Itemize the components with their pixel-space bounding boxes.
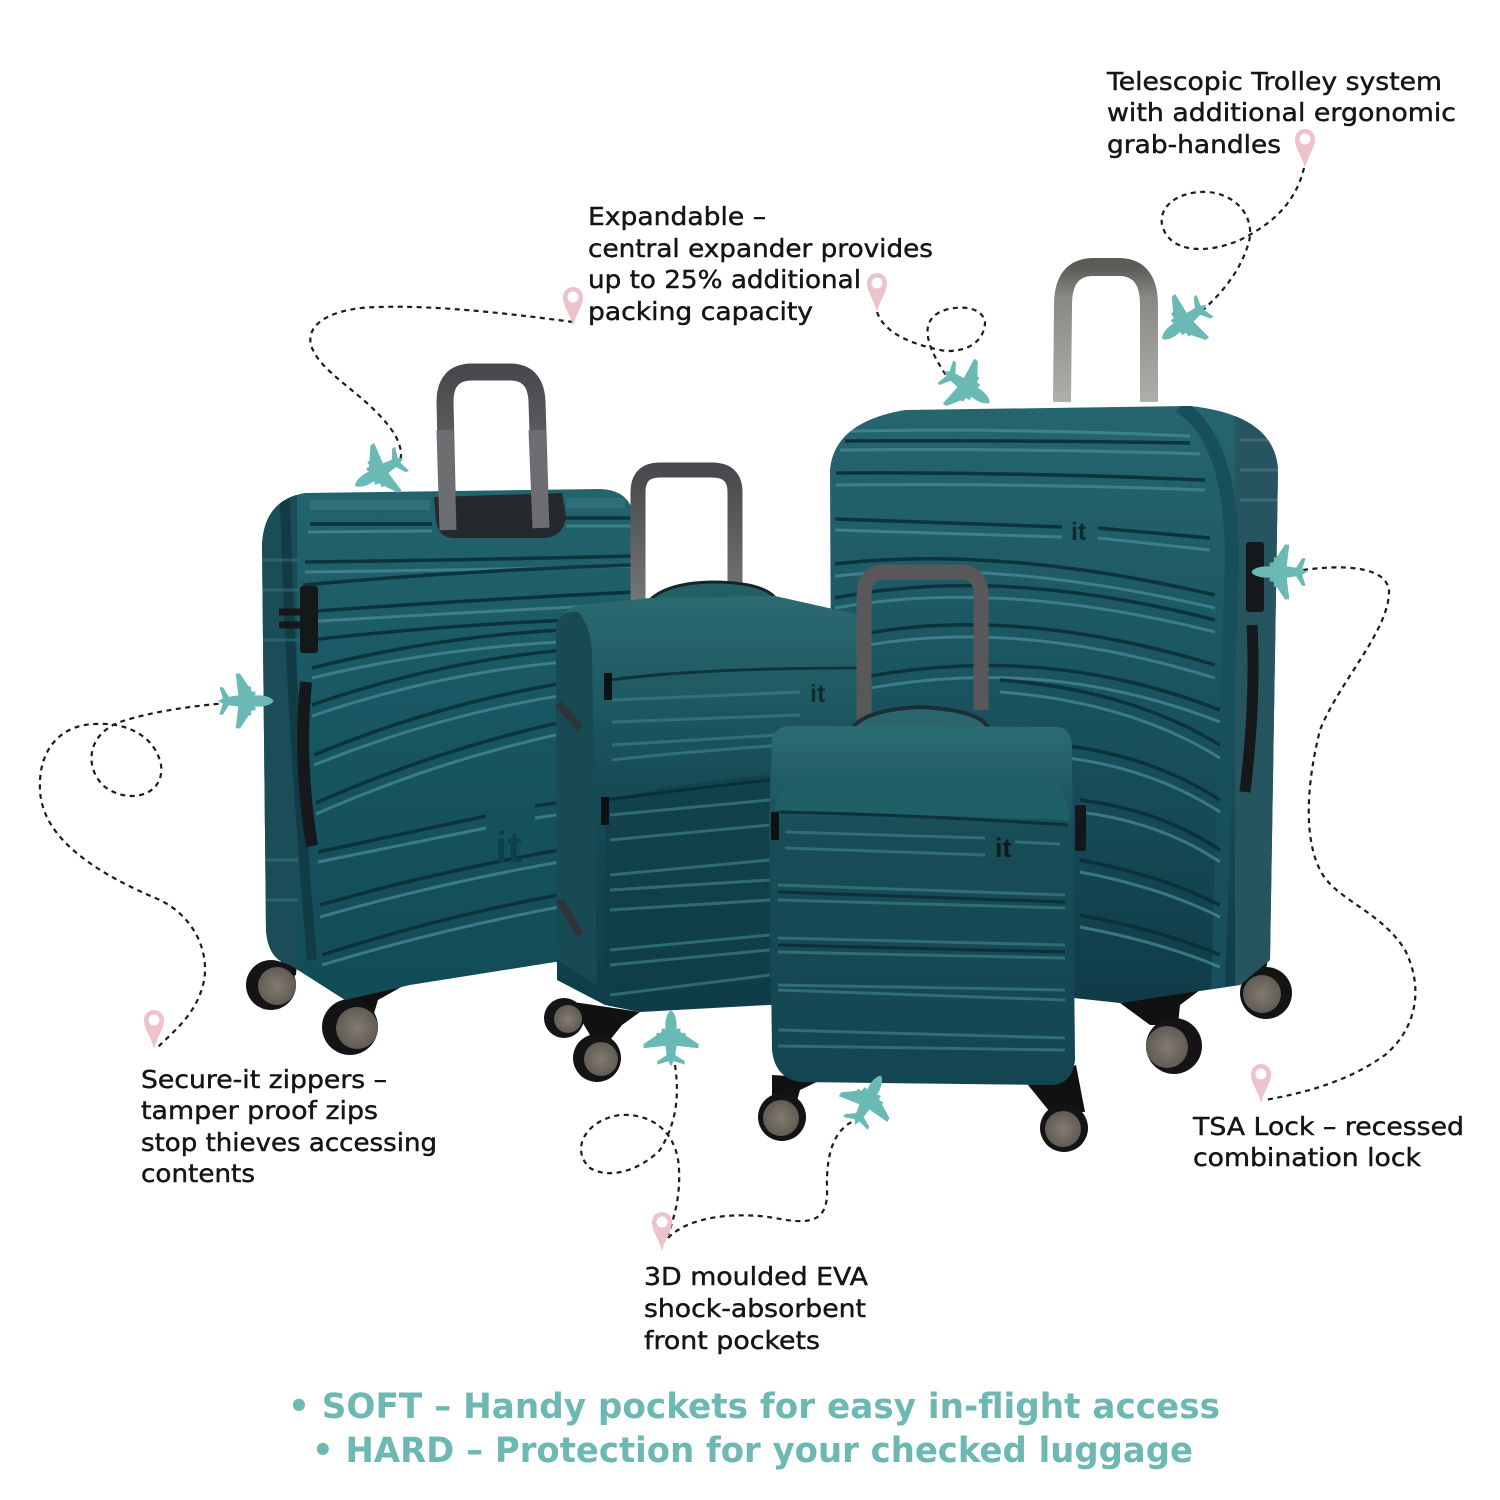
right suitcase handle: [1062, 267, 1149, 402]
medium suitcase handle: [638, 470, 735, 610]
text: telescopic trolley system: [1106, 67, 1456, 159]
small suitcase body: [769, 726, 1075, 1085]
right suitcase side grip: [1245, 625, 1253, 792]
right suitcase wheels: [1120, 960, 1292, 1074]
dashed route: expandable: [877, 308, 985, 378]
text: 3D moulded EVA: shock-absorbent: [644, 1294, 866, 1323]
text: secure-it zippers: [141, 1065, 437, 1188]
text: secure-it zippers: Secure-it zippers –: [141, 1065, 387, 1094]
icon: pin, EVA: [652, 1212, 672, 1251]
icon: pin, zippers: [144, 1010, 164, 1049]
dashed route: telescopic trolley: [1162, 168, 1304, 310]
medium suitcase body: [556, 596, 860, 1012]
text: telescopic trolley system: with additional ergonomic: [1107, 98, 1456, 127]
icon: pin, trolley: [1295, 129, 1315, 168]
medium suitcase wheels: [544, 998, 640, 1082]
text: secure-it zippers: contents: [141, 1159, 255, 1188]
heading: soft and hard summary: • SOFT – Handy pockets for easy in-flight access: [288, 1387, 1220, 1427]
small soft suitcase: [758, 572, 1088, 1152]
heading: soft and hard summary: [288, 1387, 1220, 1471]
left suitcase handle: [445, 372, 541, 530]
small suitcase wheels: [758, 1065, 1088, 1152]
medium suitcase pocket ribs: [605, 668, 860, 995]
icon: pin, expander: [867, 273, 887, 312]
left suitcase side grip: [303, 682, 312, 846]
left suitcase wheels: [246, 950, 410, 1055]
medium suitcase lower pocket: [605, 775, 770, 1012]
icon: plane, right side: [1252, 545, 1307, 599]
text: expandable: up to 25% additional: [588, 265, 861, 294]
text: expandable: packing capacity: [588, 297, 813, 326]
dashed route: EVA pockets, first plane: [581, 1065, 679, 1235]
medium suitcase logo: it: [810, 680, 826, 708]
icon: plane, left top: [342, 434, 417, 509]
text: TSA lock: [1192, 1112, 1464, 1172]
right suitcase TSA lock: [1246, 542, 1264, 612]
small suitcase upper pocket: [775, 772, 1070, 820]
text: expandable: central expander provides: [588, 234, 933, 263]
icon: plane, bottom centre: [644, 1011, 698, 1066]
small suitcase zip pull: [771, 812, 779, 840]
right suitcase shell: [825, 400, 1285, 1010]
medium soft suitcase: [544, 470, 860, 1082]
dashed route: EVA pockets, second plane: [668, 1118, 862, 1238]
text: expandable: [588, 202, 933, 326]
text: 3D moulded EVA: front pockets: [644, 1326, 820, 1355]
medium suitcase zip pulls: [605, 673, 608, 825]
left suitcase TSA lock: [300, 586, 318, 653]
medium suitcase top grab handle: [645, 582, 777, 606]
dashed route: top left pin: [310, 307, 573, 465]
dashed route: TSA lock: [1265, 567, 1415, 1100]
icon: pin, TSA: [1251, 1064, 1271, 1103]
right suitcase logo: it: [1071, 518, 1087, 546]
left suitcase zip pulls: [279, 612, 302, 625]
icon: plane, bottom right of centre: [831, 1063, 905, 1138]
icon: pin, top left: [563, 287, 583, 326]
left suitcase recessed handle well: [434, 493, 566, 538]
small suitcase top grab handle: [850, 707, 990, 732]
icon: plane, trolley: [1145, 283, 1223, 361]
text: telescopic trolley system: Telescopic Trolley system: [1106, 67, 1442, 96]
text: TSA lock: TSA Lock – recessed: [1192, 1112, 1464, 1141]
text: 3D moulded EVA: [644, 1262, 868, 1355]
text: secure-it zippers: stop thieves accessing: [141, 1128, 437, 1157]
text: secure-it zippers: tamper proof zips: [141, 1096, 378, 1125]
medium suitcase side panel: [556, 612, 597, 985]
text: expandable: Expandable –: [588, 202, 766, 231]
small suitcase handle: [864, 572, 981, 720]
left suitcase logo: it: [495, 823, 522, 872]
left suitcase shell: [255, 485, 640, 1005]
left suitcase handle poles: [445, 430, 541, 530]
small suitcase side lock: [1075, 805, 1086, 851]
text: telescopic trolley system: grab-handles: [1107, 130, 1281, 159]
small suitcase ribs: [778, 812, 1068, 1050]
text: TSA lock: combination lock: [1193, 1143, 1422, 1172]
large hard suitcase, right: [825, 267, 1292, 1074]
small suitcase logo: it: [995, 833, 1012, 863]
icon: plane, expander: [928, 348, 1005, 425]
medium suitcase side straps: [558, 703, 580, 935]
large hard suitcase, left: [246, 372, 640, 1055]
icon: plane, left side: [218, 674, 273, 728]
heading: soft and hard summary: • HARD – Protection for your checked luggage: [312, 1431, 1193, 1471]
dashed route: secure-it zippers: [40, 703, 228, 1047]
text: 3D moulded EVA: 3D moulded EVA: [644, 1262, 868, 1291]
